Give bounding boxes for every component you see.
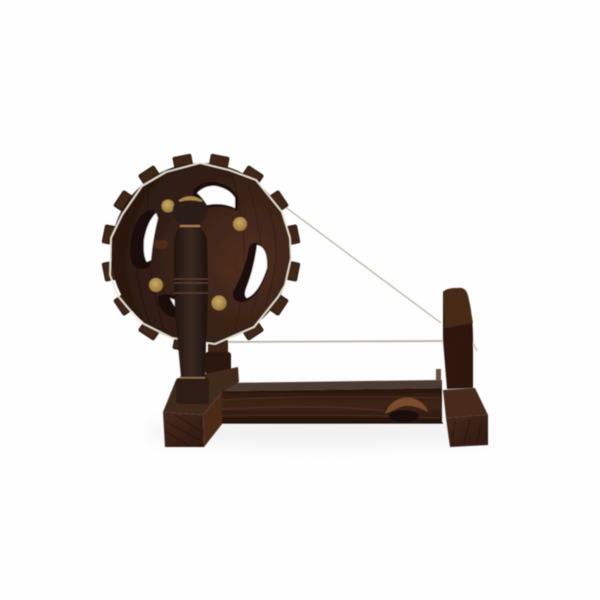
- axle post behind the wheel: [205, 340, 231, 374]
- floor shadow: [145, 420, 495, 444]
- handle column: [173, 196, 209, 404]
- charkha object: [102, 154, 488, 447]
- handle collar: [176, 378, 209, 404]
- base: right foot: [436, 369, 488, 447]
- handle shaft: [174, 226, 208, 377]
- thread: diagonal and horizontal strands: [228, 206, 477, 351]
- wheel disc: [111, 163, 291, 343]
- brass studs and pegs: [149, 200, 247, 310]
- thread wound around the wheel rim: [110, 163, 291, 344]
- handle knob: [173, 196, 207, 227]
- wheel teeth: [102, 154, 300, 352]
- right upright post: [443, 288, 473, 389]
- base: long beam: [221, 380, 443, 423]
- base: left foot: [163, 367, 239, 447]
- wheel slots: [130, 182, 268, 318]
- wheel: [102, 154, 300, 352]
- wood grain on the disc: [121, 175, 276, 335]
